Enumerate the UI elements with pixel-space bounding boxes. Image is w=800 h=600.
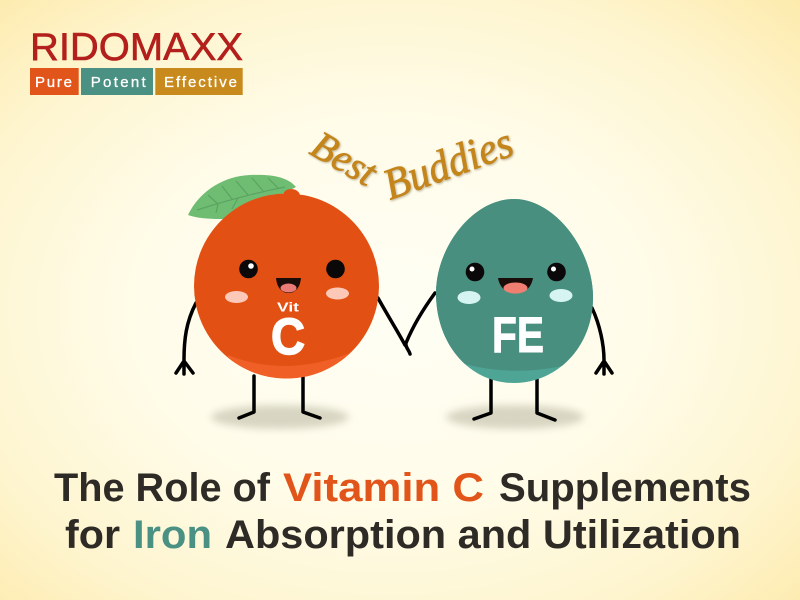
orange left eye: [239, 260, 258, 278]
script heading: Best Buddies: [304, 118, 519, 209]
tag: Pure: Pure: [35, 74, 72, 91]
tag: Pure: [30, 68, 79, 95]
label: Vit: Vit: [277, 300, 300, 314]
iron cheeks: [458, 289, 572, 304]
orange leaf: [188, 175, 296, 219]
character: iron FE: [406, 190, 612, 420]
title line 1: The Role of: [54, 466, 271, 510]
iron limbs: [406, 293, 612, 420]
orange limbs: [176, 298, 405, 418]
title line 2: Absorption and Utilization: [225, 513, 741, 557]
iron body: [436, 199, 593, 383]
title line 1: [54, 466, 751, 510]
label: FE: FE: [492, 307, 544, 363]
iron left eye: [466, 263, 484, 281]
orange body: [194, 189, 379, 378]
tag: Potent: [81, 68, 153, 95]
orange cheeks: [225, 288, 349, 303]
character: orange Vit C: [176, 175, 405, 418]
title: [54, 466, 751, 557]
orange mouth: [276, 278, 301, 293]
title line 1: Vitamin C: [283, 466, 484, 510]
iron right eye: [547, 263, 566, 281]
label: C: C: [271, 308, 305, 365]
title line 2: for: [65, 513, 120, 557]
logo wordmark: RIDOMAXX: [30, 26, 243, 69]
tag: Effective: [155, 68, 243, 95]
character shadows: [211, 405, 584, 429]
script heading: Best Buddies: Buddies: [377, 118, 519, 209]
tag: Potent: Potent: [91, 74, 147, 91]
script heading: Best Buddies: Best: [304, 122, 386, 195]
title line 1: Supplements: [499, 466, 751, 510]
orange right eye: [326, 260, 345, 278]
iron mouth: [498, 278, 533, 294]
title line 2: Iron: [133, 513, 212, 557]
tag: Effective: Effective: [164, 74, 237, 91]
logo: [30, 26, 243, 95]
